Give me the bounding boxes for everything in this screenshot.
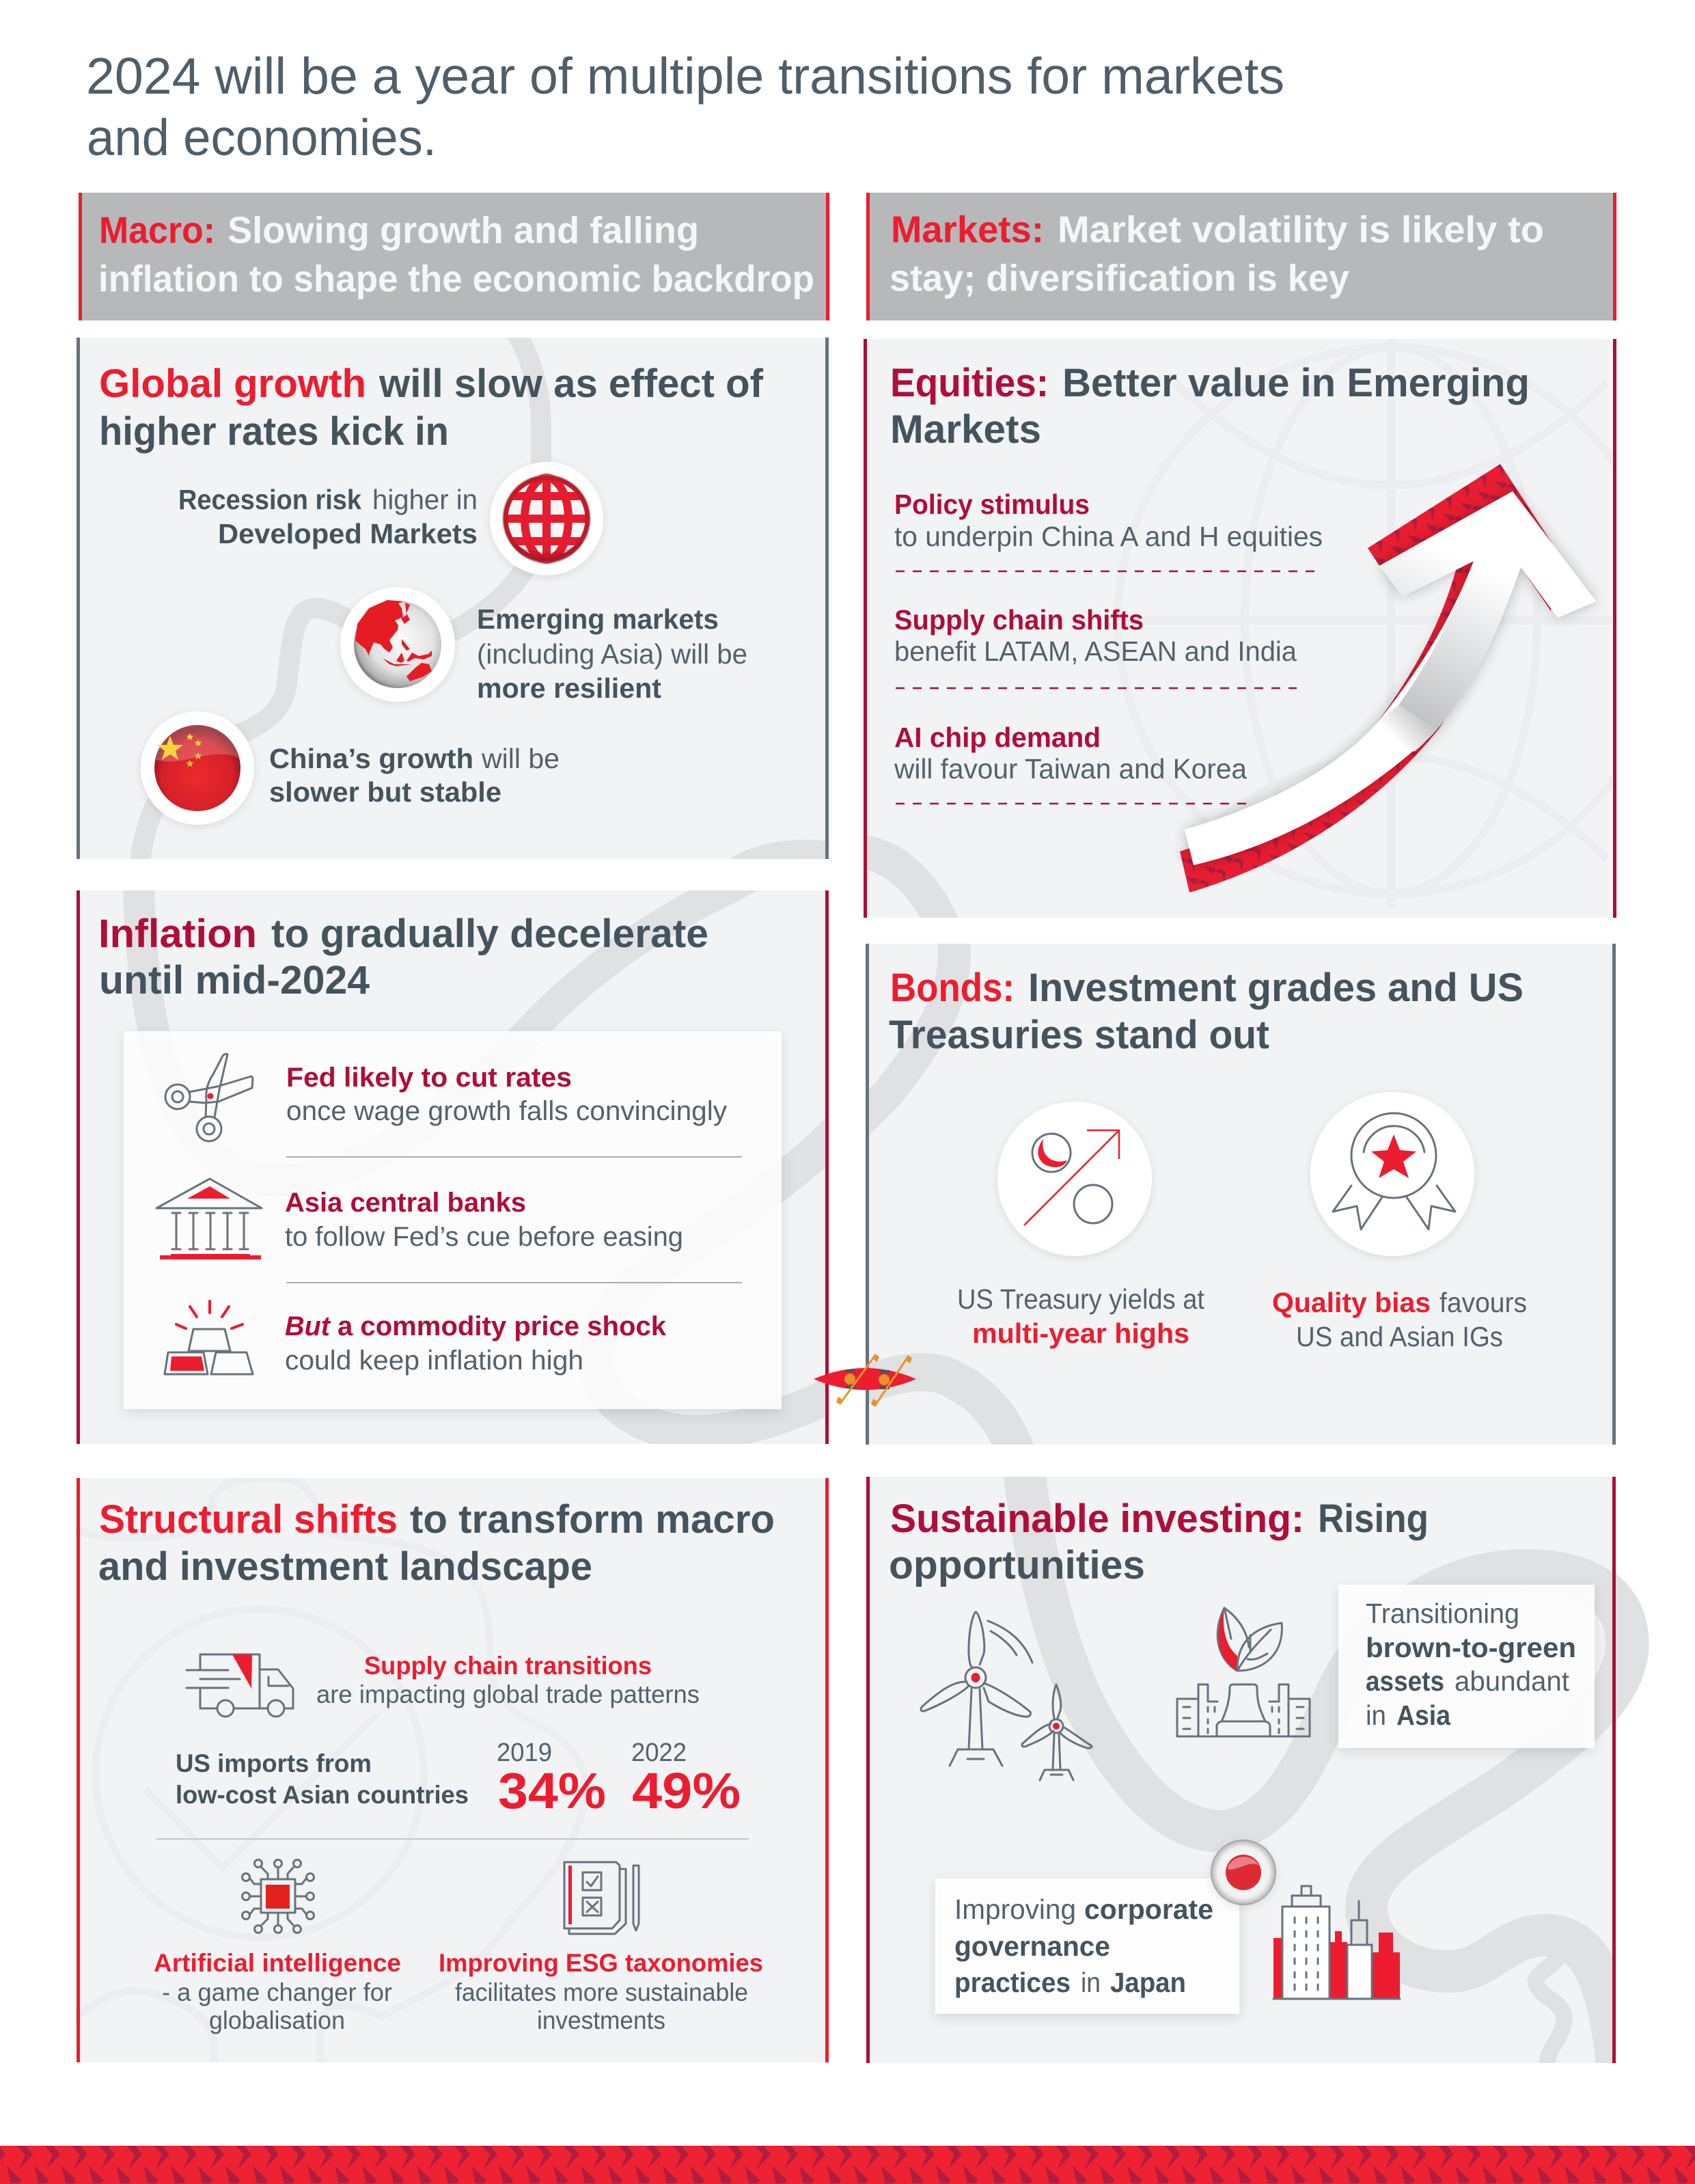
text: commodity: could keep inflation high	[285, 1346, 583, 1376]
header: markets: stay; diversification is key	[890, 257, 1349, 299]
text: supply chain: are impacting global trade patterns	[316, 1680, 700, 1708]
heading: Inflation	[98, 912, 257, 956]
heading: Markets	[890, 407, 1041, 452]
icon: esg checklist	[564, 1862, 639, 1934]
callout: brown to green: assets	[1366, 1665, 1444, 1697]
text: artificial intelligence	[154, 1949, 401, 2034]
header: macro: inflation to shape the economic backdrop	[98, 257, 814, 299]
text: quality bias: favours	[1439, 1287, 1527, 1318]
heading: to transform macro	[410, 1497, 775, 1542]
callout: corporate governance: Improving	[954, 1894, 1076, 1925]
stat: 2022	[631, 1738, 741, 1819]
text: artificial intelligence: - a game changer for	[162, 1978, 392, 2006]
heading: until mid-2024	[99, 958, 370, 1002]
text: supply chain	[316, 1652, 700, 1708]
icon: city skyline	[1273, 1886, 1400, 1999]
text: recession risk: higher in	[372, 484, 478, 515]
text: recession risk: Recession risk	[178, 484, 361, 515]
item: policy stimulus: to underpin China A and H equities	[894, 521, 1323, 552]
heading: will slow as effect of	[378, 361, 764, 406]
callout: brown to green: in	[1366, 1700, 1386, 1731]
heading: Structural shifts	[99, 1497, 398, 1542]
text: asia banks: Asia central banks	[285, 1188, 526, 1218]
stat: 2019	[497, 1738, 606, 1819]
stat: 2022: 49%	[632, 1762, 741, 1819]
text: recession risk	[178, 484, 478, 549]
header: markets: Markets:	[891, 208, 1044, 250]
icon: quality ribbon	[1310, 1092, 1474, 1256]
text: fed: once wage growth falls convincingly	[286, 1096, 727, 1126]
icon: wind turbines	[921, 1612, 1092, 1780]
text: treasury yields: US Treasury yields at	[957, 1283, 1205, 1315]
icon: scissors	[165, 1054, 253, 1141]
callout: brown to green	[1338, 1585, 1595, 1748]
icon: central bank	[156, 1179, 262, 1259]
text: asia banks: to follow Fed’s cue before easing	[285, 1222, 683, 1252]
header: markets	[866, 193, 1616, 320]
item: supply chain shifts	[894, 604, 1297, 688]
footer band: chevron pattern	[0, 2146, 1695, 2184]
text: asia banks	[285, 1188, 683, 1252]
callout: corporate governance: Japan	[1110, 1967, 1186, 1998]
header: markets: Market volatility is likely to	[1058, 208, 1544, 250]
item: supply chain shifts: benefit LATAM, ASEAN and India	[894, 636, 1297, 667]
text: esg taxonomies: facilitates more sustainable	[455, 1978, 748, 2006]
text: esg taxonomies	[439, 1949, 763, 2034]
text: esg taxonomies: investments	[537, 2006, 665, 2034]
text: supply chain: Supply chain transitions	[364, 1652, 652, 1680]
heading: Equities:	[890, 361, 1049, 405]
title: and economies.	[87, 109, 437, 166]
text: quality bias: US and Asian IGs	[1296, 1321, 1503, 1352]
heading: Rising	[1318, 1497, 1429, 1541]
text: china growth	[269, 743, 560, 808]
text: commodity: But	[285, 1311, 331, 1341]
heading: Treasuries stand out	[889, 1013, 1269, 1057]
icon: ai chip	[242, 1860, 314, 1933]
text: commodity: a commodity price shock	[337, 1311, 667, 1341]
heading: to gradually decelerate	[271, 912, 708, 956]
text: treasury yields: multi-year highs	[972, 1318, 1189, 1349]
text: treasury yields	[957, 1283, 1205, 1349]
stat: 2019: 2019	[497, 1738, 552, 1767]
panel: equities	[864, 339, 1616, 918]
title: 2024 will be a year of multiple transitions for markets	[86, 47, 1284, 105]
icon: leaves and factory	[1177, 1608, 1310, 1736]
text: emerging markets: Emerging markets	[477, 603, 719, 635]
stat: 2022: 2022	[631, 1738, 687, 1767]
text: emerging markets: (including Asia) will be	[477, 638, 747, 670]
stat: 2019: 34%	[498, 1762, 606, 1819]
item: ai chip demand: AI chip demand	[894, 722, 1101, 753]
text: recession risk: Developed Markets	[218, 518, 478, 549]
item: supply chain shifts: Supply chain shifts	[894, 604, 1144, 636]
heading: Sustainable investing:	[890, 1497, 1304, 1541]
heading: Better value in Emerging	[1062, 361, 1530, 405]
text: artificial intelligence: Artificial intelligence	[154, 1949, 401, 1977]
callout: brown to green: Transitioning	[1366, 1598, 1519, 1629]
icon: gold bars	[165, 1301, 253, 1374]
heading	[98, 912, 708, 1002]
text: us imports	[176, 1749, 469, 1809]
heading: and investment landscape	[98, 1544, 592, 1589]
header: macro: Slowing growth and falling	[228, 209, 699, 251]
panel: sustainable investing	[866, 1477, 1616, 2063]
heading	[890, 361, 1530, 452]
callout: brown to green: brown-to-green	[1366, 1632, 1576, 1663]
callout: corporate governance: governance	[954, 1930, 1110, 1962]
text: fed	[286, 1063, 727, 1126]
card: inflation drivers	[124, 1031, 782, 1409]
callout: brown to green: Asia	[1396, 1700, 1451, 1731]
header: macro: Macro:	[99, 209, 215, 251]
text: commodity	[285, 1311, 667, 1376]
heading	[889, 1497, 1429, 1587]
text: quality bias	[1272, 1287, 1527, 1352]
panel: structural shifts	[77, 1478, 829, 2062]
heading	[98, 1497, 775, 1589]
heading: Bonds:	[890, 966, 1015, 1010]
item: ai chip demand: will favour Taiwan and Korea	[894, 753, 1247, 784]
text: china growth: China’s growth	[269, 743, 473, 774]
text: emerging markets	[477, 603, 747, 704]
heading: Investment grades and US	[1028, 966, 1524, 1010]
text: artificial intelligence: globalisation	[209, 2006, 345, 2034]
item: policy stimulus: Policy stimulus	[894, 489, 1090, 520]
text: quality bias: Quality bias	[1272, 1287, 1431, 1318]
icon: china ball	[141, 711, 254, 825]
heading: higher rates kick in	[99, 409, 449, 454]
text: china growth: slower but stable	[269, 776, 501, 808]
heading	[99, 361, 764, 454]
text: us imports: US imports from	[176, 1749, 372, 1777]
icon: truck	[187, 1654, 293, 1717]
item: ai chip demand	[894, 722, 1250, 804]
panel: bonds	[866, 944, 1616, 1445]
text: fed: Fed likely to cut rates	[286, 1063, 572, 1093]
heading	[889, 966, 1524, 1057]
heading: opportunities	[889, 1543, 1145, 1587]
callout: corporate governance	[935, 1879, 1239, 2014]
text: china growth: will be	[481, 743, 560, 774]
panel: global growth	[77, 338, 829, 859]
icon: kayak	[814, 1354, 916, 1407]
text: emerging markets: more resilient	[477, 672, 661, 704]
text: esg taxonomies: Improving ESG taxonomies	[439, 1949, 763, 1977]
icon: red globe	[490, 462, 603, 575]
panel: inflation	[77, 890, 829, 1444]
item: policy stimulus	[894, 489, 1323, 571]
icon: rising arrow	[1180, 464, 1596, 892]
callout: corporate governance: in	[1081, 1967, 1101, 1998]
callout: corporate governance: practices	[954, 1967, 1071, 1998]
icon: asia globe	[340, 587, 455, 702]
icon: japan ball	[1211, 1840, 1276, 1905]
header: macro	[79, 193, 829, 320]
title	[86, 47, 1284, 166]
icon: yield percent	[997, 1102, 1152, 1256]
text: us imports: low-cost Asian countries	[176, 1781, 469, 1809]
callout: brown to green: abundant	[1455, 1665, 1570, 1697]
heading: Global growth	[99, 361, 366, 406]
callout: corporate governance: corporate	[1084, 1894, 1213, 1925]
